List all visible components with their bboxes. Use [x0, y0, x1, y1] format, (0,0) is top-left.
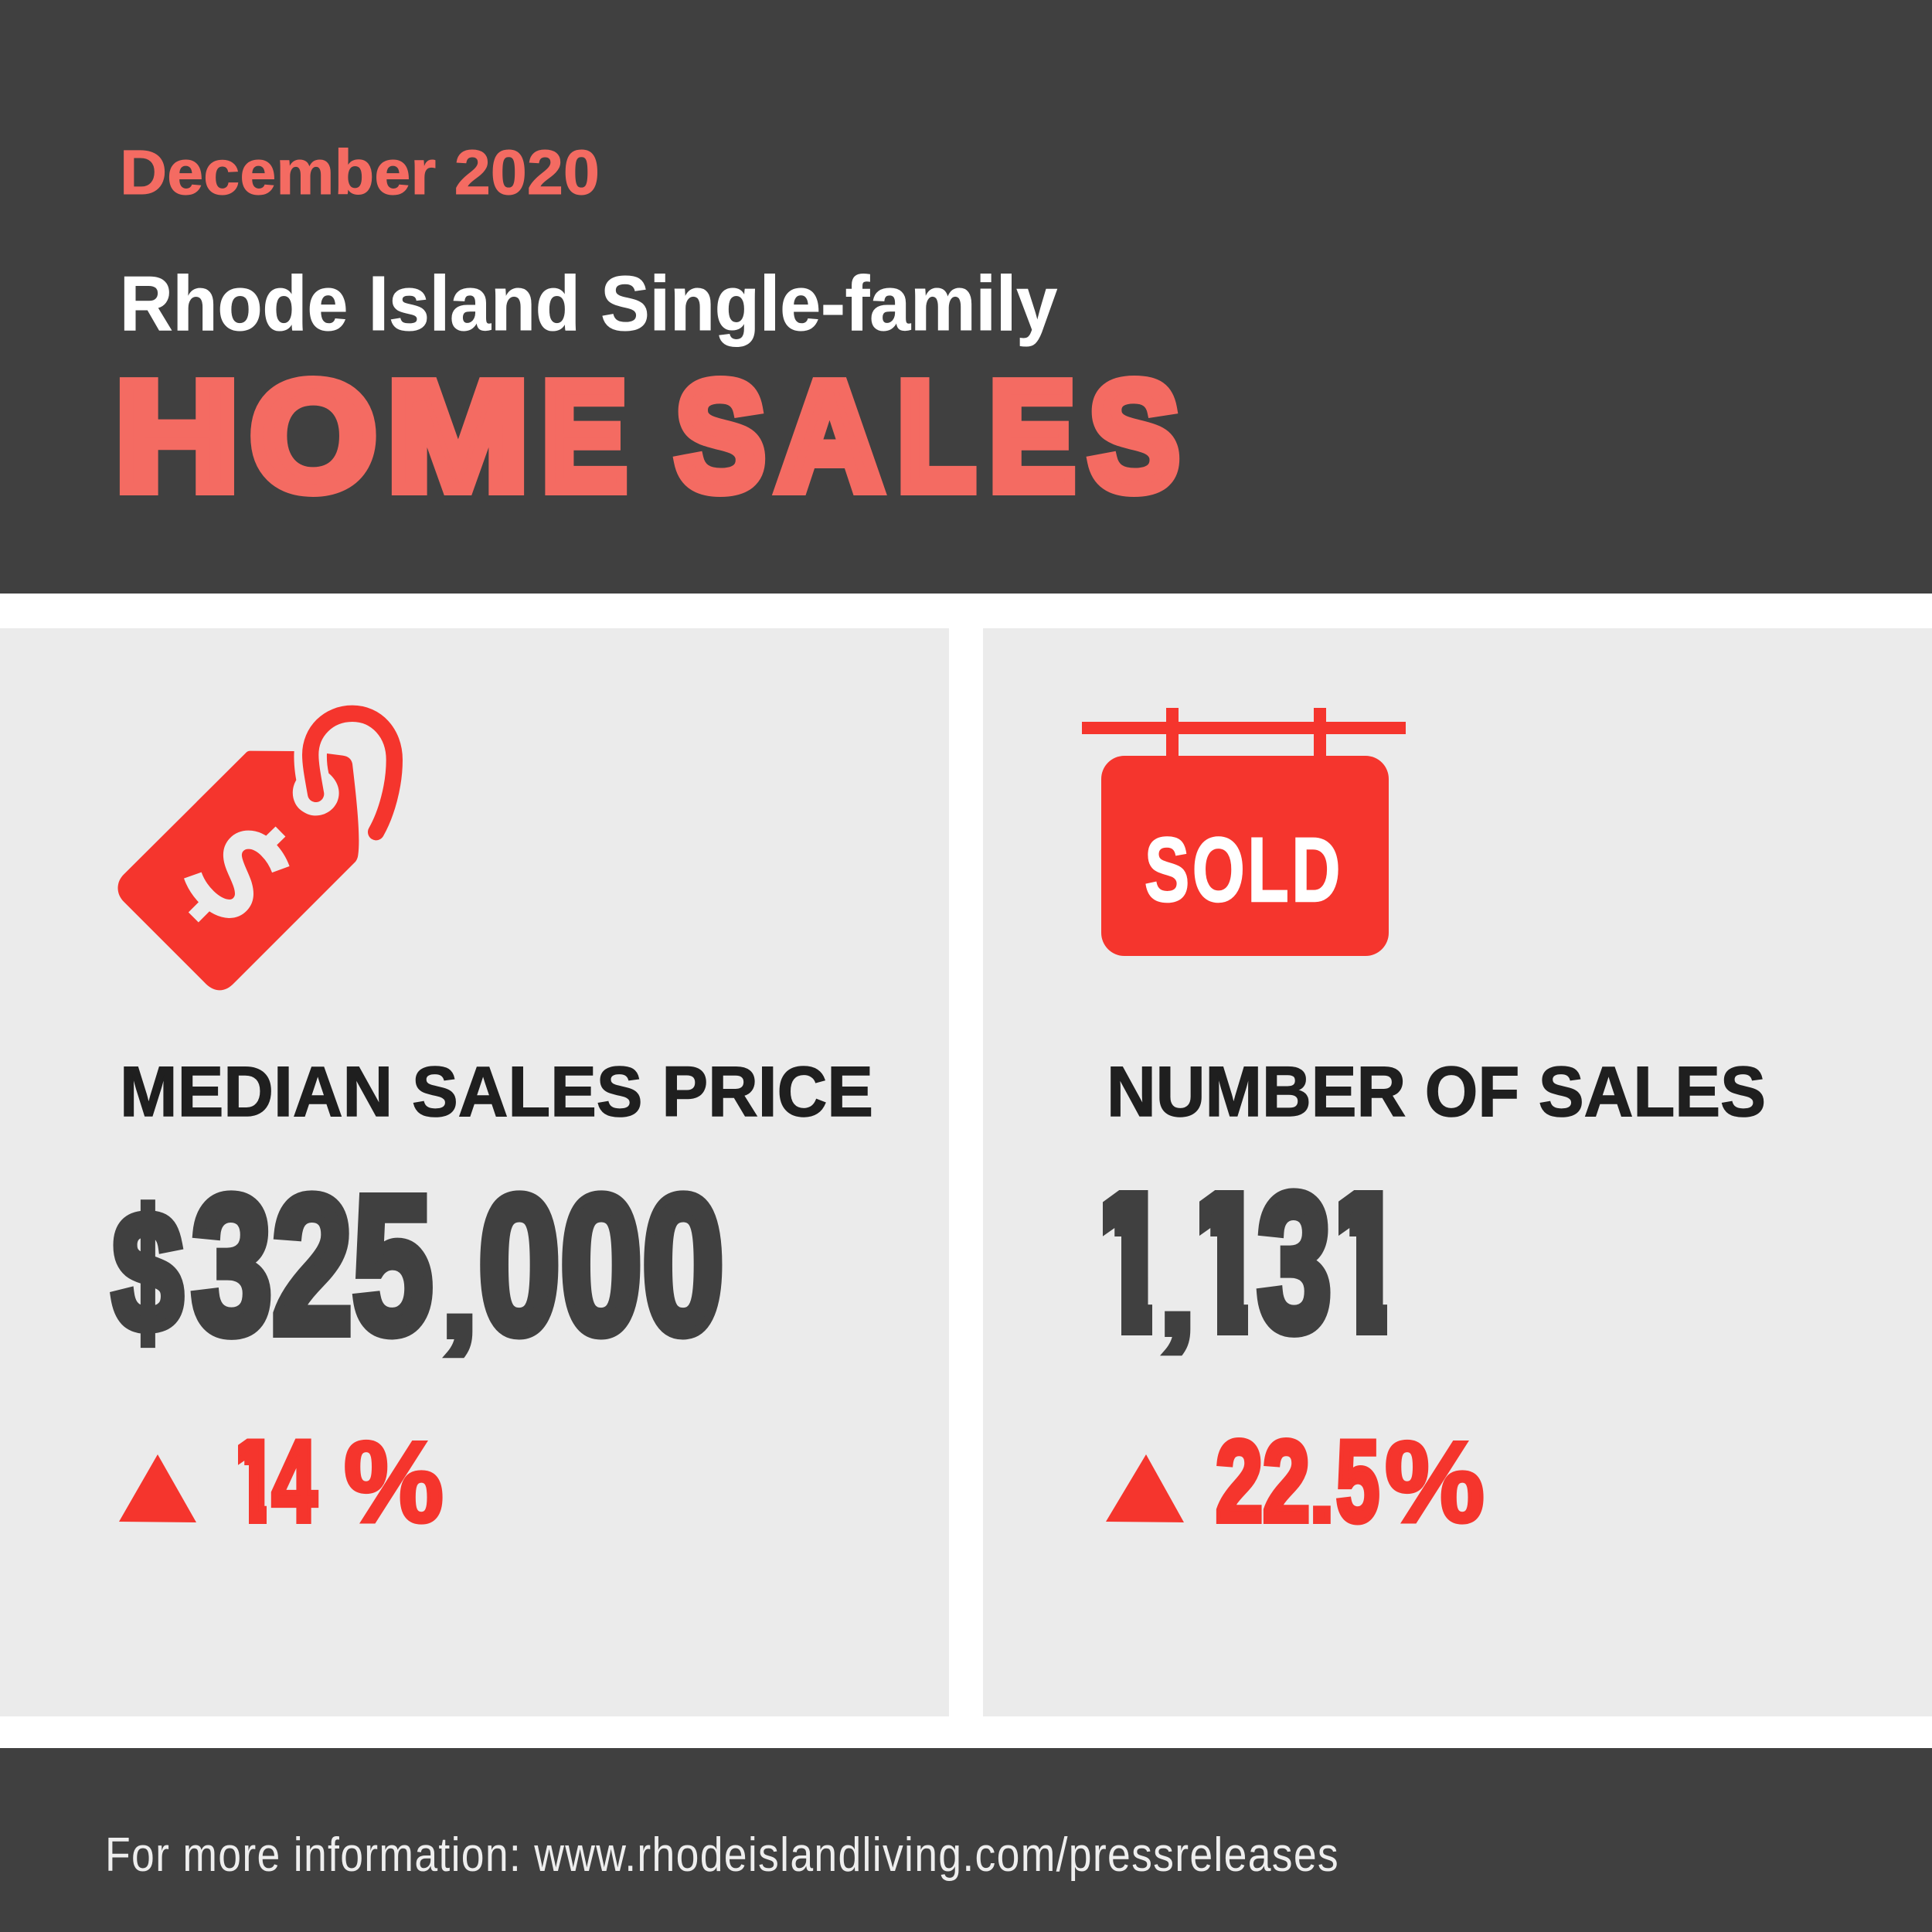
panel: number of sales [983, 628, 1932, 1716]
change: 14 percent: % [344, 1417, 444, 1546]
subtitle: Rhode Island Single-family [120, 260, 1057, 347]
change: 22.5 percent: 22 [1216, 1417, 1310, 1546]
change: 22.5 percent: . [1311, 1448, 1333, 1539]
value: sales count: , [1160, 1224, 1195, 1359]
main title: E [542, 351, 627, 522]
main title [115, 351, 1179, 522]
main title: O [250, 351, 376, 522]
value: price: 325 [192, 1155, 433, 1374]
icon: price tag [117, 713, 394, 990]
value: sales count: 1 [1314, 1153, 1410, 1372]
icon: sold sign [1082, 708, 1406, 956]
icon: sold sign: SOLD [1145, 819, 1343, 921]
change: 22.5 percent: 5 [1336, 1417, 1379, 1546]
date heading: December 2020 [120, 138, 600, 208]
footer text: For more information: www.rhodeislandliving.com/pressreleases [105, 1828, 1339, 1882]
label: number of sales: NUMBER OF SALES [1107, 1053, 1766, 1131]
value: sales count: 1 [1175, 1153, 1271, 1372]
main title: L [897, 351, 975, 522]
value: price: $ [113, 1179, 182, 1366]
value: sales count: 1 [1079, 1153, 1175, 1372]
footer panel [0, 1748, 1932, 1932]
main title: S [1089, 351, 1179, 522]
value: price [113, 1155, 724, 1374]
main title: S [675, 351, 765, 522]
value: price: 000 [478, 1155, 724, 1374]
panel: median sales price [0, 628, 949, 1716]
icon: up triangle [1106, 1454, 1184, 1522]
change: 14 percent: 1 [223, 1417, 281, 1546]
change: 14 percent [238, 1439, 443, 1525]
label: median sales price: MEDIAN SALES PRICE [120, 1053, 873, 1131]
header panel [0, 0, 1932, 594]
change: 22.5 percent [1216, 1417, 1485, 1546]
change: 14 percent: 4 [272, 1417, 317, 1546]
value: sales count: 3 [1257, 1153, 1332, 1372]
change: 22.5 percent: % [1385, 1417, 1485, 1546]
main title: H [115, 351, 239, 522]
main title: M [387, 351, 529, 522]
value: sales count [1103, 1188, 1387, 1355]
icon: up triangle [119, 1454, 196, 1522]
value: price: , [442, 1226, 477, 1362]
main title: E [989, 351, 1075, 522]
main title: A [777, 351, 883, 522]
